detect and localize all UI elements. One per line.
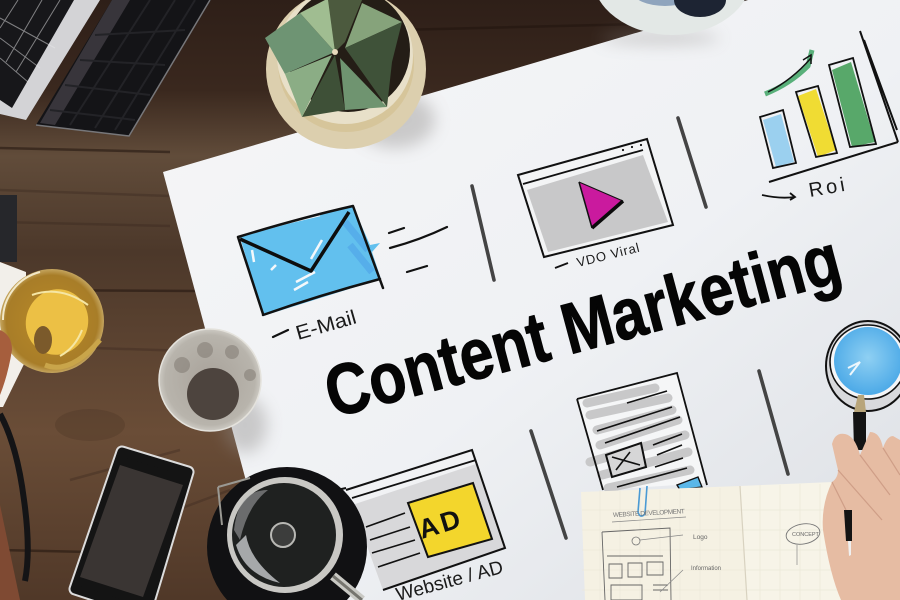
open notebook — [581, 482, 860, 600]
ceramic plate — [592, 0, 752, 35]
notebook concept note: CONCEPT — [792, 532, 820, 538]
icon: viral video — [518, 139, 673, 270]
notebook information note: Information — [691, 566, 721, 572]
paper shadows — [223, 32, 720, 453]
icon: email envelope — [238, 206, 447, 345]
empty water glass — [159, 329, 261, 431]
label: roi: Roi — [807, 174, 846, 202]
cactus plant pot — [265, 0, 426, 149]
dark notebook corner — [0, 195, 17, 262]
notebook heading: WEBSITE DEVELOPMENT — [613, 508, 685, 519]
laptop — [0, 0, 211, 136]
cactus — [265, 0, 402, 117]
icon: roi bar chart — [760, 31, 898, 202]
icon: magnifier — [826, 321, 900, 411]
label: ad: AD — [415, 504, 464, 545]
icon: website advert — [337, 450, 506, 600]
hand with pen — [823, 395, 900, 600]
notebook logo note: Logo — [693, 534, 708, 541]
label: email: E-Mail — [293, 307, 359, 345]
glasses and arm — [0, 330, 28, 600]
smartphone — [75, 452, 188, 600]
glass of lemon tea — [0, 269, 104, 373]
divider strokes — [472, 118, 788, 538]
glass teapot — [207, 467, 367, 600]
icon: article document — [577, 373, 707, 490]
left paper scrap — [0, 262, 26, 407]
label: video: VDO Viral — [575, 240, 641, 270]
